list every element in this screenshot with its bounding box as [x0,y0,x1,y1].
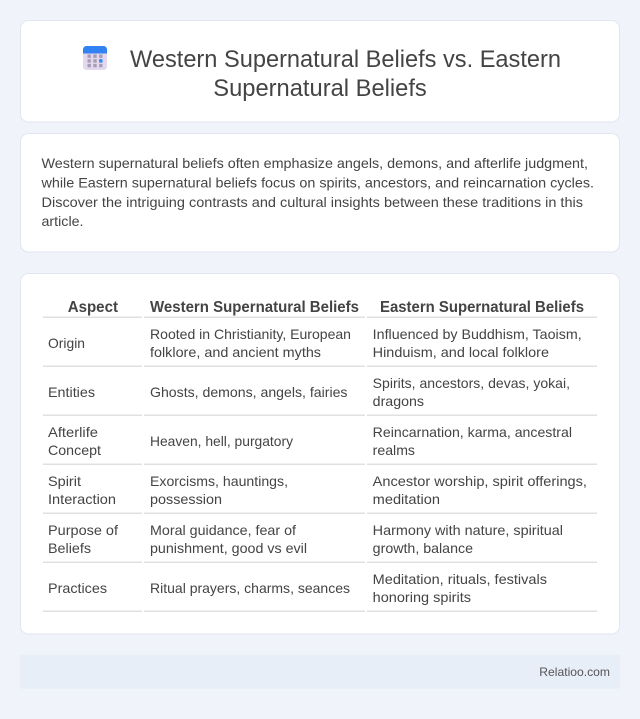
row: spirit interaction [48,473,587,507]
row: entities [48,375,570,409]
row: practices: Ritual prayers, charms, seances [150,580,350,596]
footer brand text: Relatioo.com [539,665,610,679]
row: origin [48,326,582,360]
row: purpose of beliefs: punishment, good vs evil [150,540,307,556]
intro paragraph: while Eastern supernatural beliefs focus on spirits, ancestors, and reincarnation cycles. [40,174,594,190]
row: purpose of beliefs [48,522,563,556]
panel: title card [20,20,620,122]
row: spirit interaction: Spirit [48,473,81,489]
panel: intro text card [20,134,620,252]
intro paragraph: Western supernatural beliefs often emphasize angels, demons, and afterlife judgment, [42,155,588,171]
table header row: Eastern Supernatural Beliefs [380,299,584,316]
row: afterlife concept: realms [373,442,415,458]
row: origin: folklore, and ancient myths [150,344,321,360]
row: purpose of beliefs: Harmony with nature, spiritual [373,522,563,538]
row: spirit interaction: meditation [373,491,440,507]
row: purpose of beliefs: growth, balance [373,540,473,556]
title: Supernatural Beliefs [213,75,427,102]
row: origin: Rooted in Christianity, European [150,326,351,342]
intro paragraph: article. [42,213,84,229]
table header row [68,299,584,316]
row: afterlife concept [48,424,572,458]
table header row: Aspect [68,299,119,316]
row: afterlife concept: Reincarnation, karma, ancestral [373,424,572,440]
intro paragraph: Discover the intriguing contrasts and cultural insights between these traditions in this [42,194,583,210]
row: spirit interaction: Ancestor worship, spirit offerings, [373,473,587,489]
row: entities: dragons [373,393,424,409]
row: entities: Entities [48,384,95,400]
row: origin: Influenced by Buddhism, Taoism, [373,326,582,342]
row: afterlife concept: Afterlife [48,424,98,440]
row: spirit interaction: possession [150,491,222,507]
table header row: Western Supernatural Beliefs [150,299,359,316]
row: practices: Meditation, rituals, festivals [373,571,547,587]
row: purpose of beliefs: Moral guidance, fear of [150,522,296,538]
row: practices: honoring spirits [373,589,471,605]
row: purpose of beliefs: Purpose of [48,522,118,538]
row: afterlife concept: Heaven, hell, purgatory [150,433,293,449]
panel: comparison table [20,274,620,634]
row: entities: Ghosts, demons, angels, fairies [150,384,348,400]
row: entities: Spirits, ancestors, devas, yokai, [373,375,570,391]
intro paragraph [40,155,594,229]
row: origin: Hinduism, and local folklore [373,344,549,360]
row: afterlife concept: Concept [48,442,101,458]
row: spirit interaction: Interaction [48,491,116,507]
row: origin: Origin [48,335,85,351]
title: Western Supernatural Beliefs vs. Eastern [130,46,561,73]
footer bar [20,655,620,689]
row: purpose of beliefs: Beliefs [48,540,91,556]
row: spirit interaction: Exorcisms, hauntings, [150,473,288,489]
row: practices: Practices [48,580,107,596]
icon: calendar [83,46,107,70]
row: practices [48,571,547,605]
title [130,46,561,102]
